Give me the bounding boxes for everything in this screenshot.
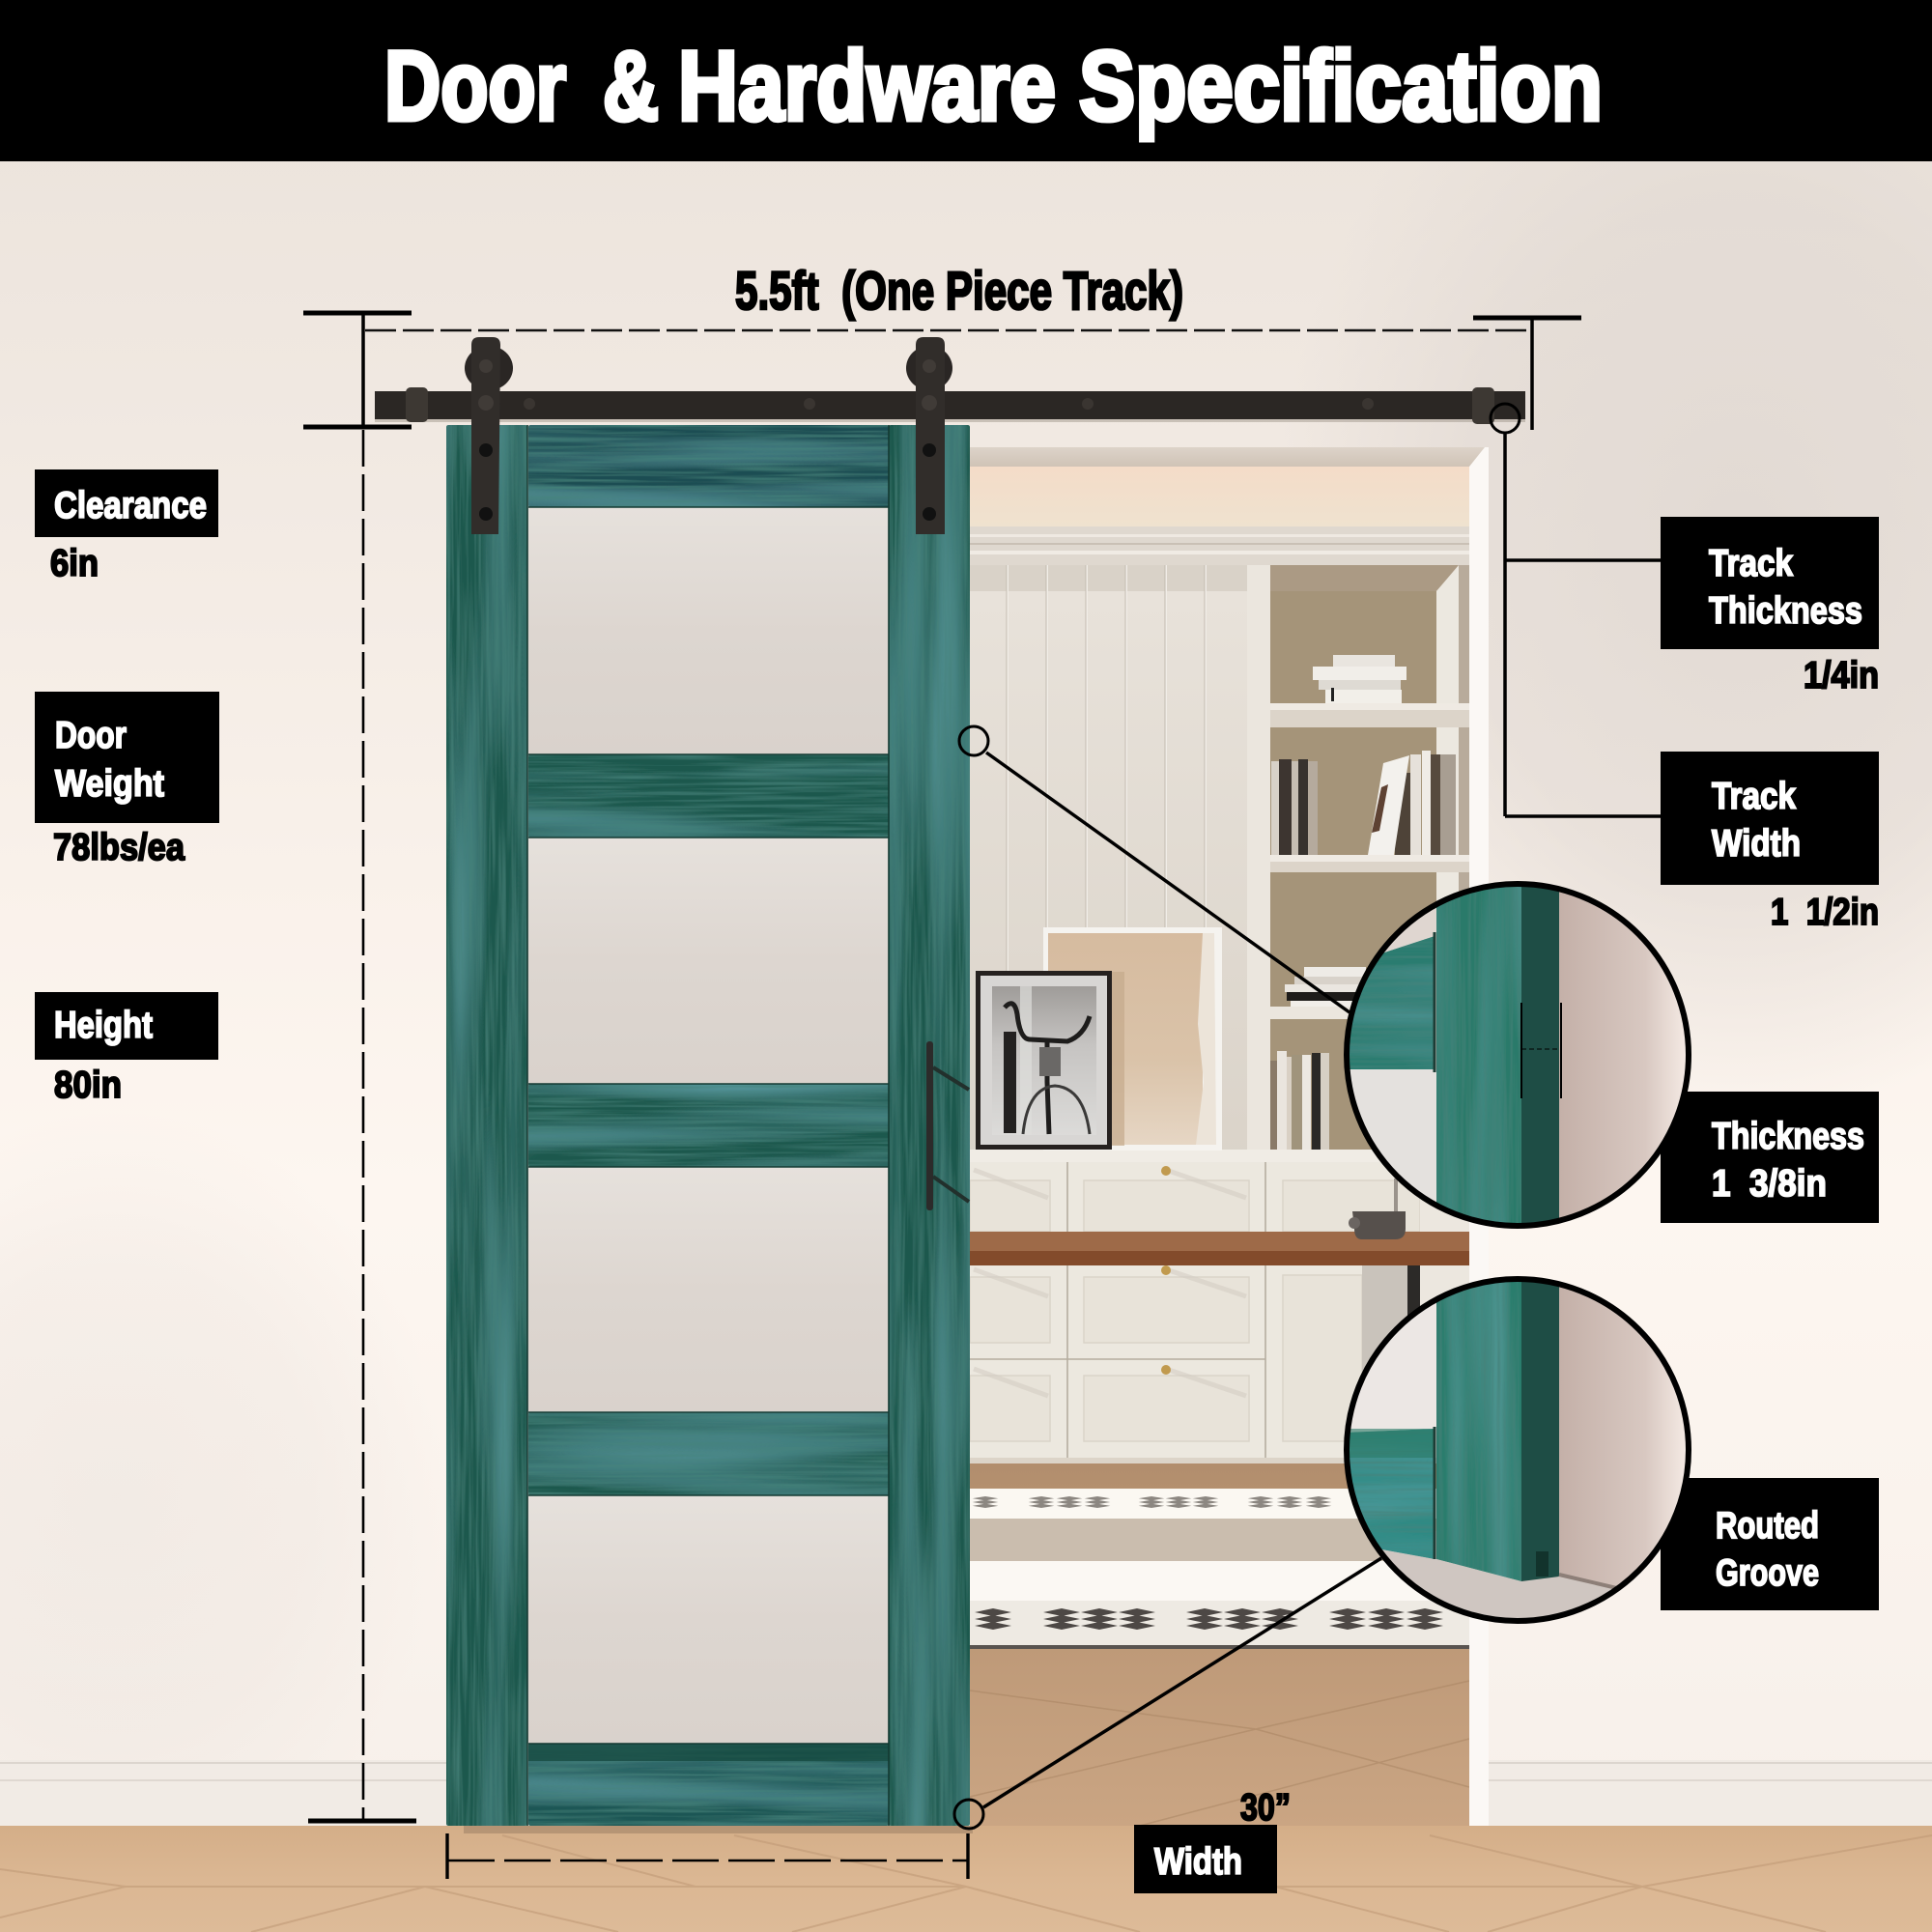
books: second shelf — [1271, 751, 1456, 855]
track callout lines — [1491, 404, 1662, 816]
floor — [0, 1826, 1932, 1932]
title: Hardware — [678, 31, 1056, 141]
books: fourth shelf — [1270, 1051, 1329, 1150]
lintel and ceiling — [970, 447, 1485, 565]
top rail — [528, 425, 889, 507]
watercolor artwork — [1043, 927, 1222, 1151]
hanger left — [465, 337, 513, 534]
bookcase — [1247, 565, 1469, 1164]
label: routed groove — [1661, 1478, 1879, 1610]
bottom rail — [528, 1744, 889, 1826]
books: top shelf — [1313, 655, 1406, 703]
label: width: Width — [1154, 1841, 1242, 1883]
books: third shelf — [1285, 967, 1366, 1007]
label: door weight: Weight — [55, 763, 164, 805]
label: clearance: 6in — [50, 543, 99, 584]
rail two — [528, 754, 889, 838]
label: clearance: Clearance — [54, 485, 207, 526]
label: track width: Width — [1712, 823, 1801, 865]
label: thickness — [1661, 1092, 1879, 1223]
label: thickness: Thickness — [1712, 1116, 1864, 1157]
label: thickness: 1 3/8in — [1712, 1163, 1827, 1205]
title: Door — [384, 31, 566, 141]
right stile — [889, 425, 970, 1826]
label: height — [35, 992, 218, 1106]
room floor — [970, 1463, 1469, 1826]
label: routed groove: Routed — [1716, 1505, 1819, 1547]
width dimension — [447, 1833, 968, 1879]
label: track width: Track — [1712, 776, 1796, 817]
cabinets — [970, 1162, 1469, 1463]
detail circle: routed groove — [1344, 1276, 1691, 1628]
title: & — [603, 31, 659, 141]
label: door weight: 78lbs/ea — [53, 827, 185, 868]
glass panels — [527, 507, 889, 1744]
label: track thickness: Thickness — [1709, 590, 1862, 632]
rug — [970, 1489, 1469, 1649]
barn door — [446, 425, 970, 1826]
label: track width: 1 1/2in — [1771, 892, 1879, 933]
left stile — [446, 425, 527, 1826]
label: door weight: Door — [55, 715, 127, 756]
header bar — [0, 0, 1932, 161]
leader: door edge to thickness detail — [959, 726, 1350, 1012]
label: width — [1134, 1787, 1291, 1893]
label: height: Height — [54, 1005, 153, 1046]
title — [384, 31, 1603, 141]
baseboard left — [0, 1760, 446, 1828]
framed bicycle photo — [976, 971, 1112, 1150]
detail circle: door thickness — [1344, 881, 1691, 1234]
label: routed groove: Groove — [1716, 1552, 1819, 1594]
label: track thickness: Track — [1709, 543, 1793, 584]
title: Specification — [1079, 31, 1603, 141]
desk top — [970, 1232, 1469, 1265]
label: track thickness — [1661, 517, 1879, 696]
track length dimension: 5.5ft (One Piece Track) — [735, 260, 1183, 321]
beadboard wall — [970, 565, 1256, 1171]
bowl on desk — [1349, 1179, 1406, 1239]
rail four — [528, 1412, 889, 1495]
label: track thickness: 1/4in — [1804, 655, 1879, 696]
clearance dimension — [303, 313, 412, 427]
bookcase base shelf — [970, 1150, 1469, 1162]
rail three — [528, 1084, 889, 1167]
label: height: 80in — [54, 1065, 122, 1106]
label: door weight — [35, 692, 219, 868]
label: clearance — [35, 469, 218, 584]
sliding track — [375, 387, 1525, 424]
leader: door bottom to groove detail — [954, 1558, 1381, 1829]
baseboard right — [1485, 1760, 1932, 1828]
door handle — [926, 1041, 969, 1210]
room seen through the doorway — [970, 447, 1485, 1826]
label: width: 30” — [1240, 1787, 1291, 1829]
height dimension — [308, 430, 416, 1821]
hanger right — [906, 337, 952, 534]
door jamb — [1469, 447, 1489, 1826]
label: track width — [1661, 752, 1879, 933]
